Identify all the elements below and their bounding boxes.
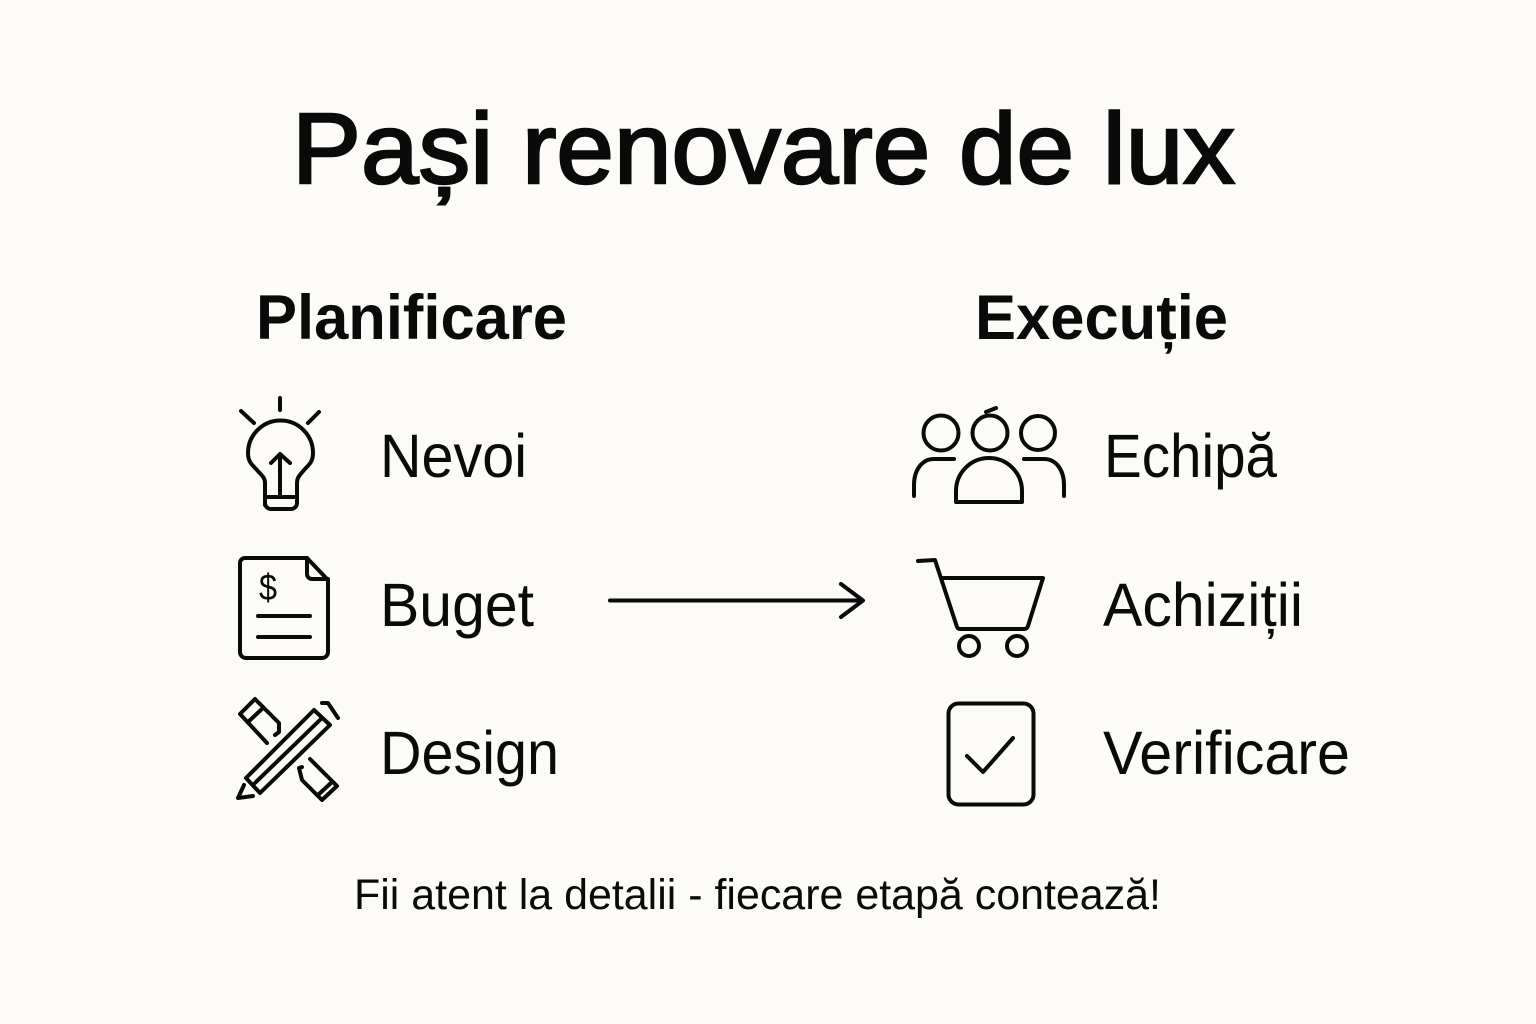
title: Pași renovare de lux bbox=[292, 93, 1235, 205]
icon: checkbox bbox=[948, 704, 1034, 804]
heading: Execuție: Execuție bbox=[975, 283, 1228, 354]
label: Achiziții: Achiziții bbox=[1103, 571, 1303, 639]
icon: light bulb with arrow bbox=[241, 398, 319, 509]
label: Design: Design bbox=[380, 719, 559, 787]
footer note: Fii atent la detalii - fiecare etapă contează! bbox=[354, 871, 1161, 919]
icon: shopping cart bbox=[918, 560, 1043, 656]
label: Buget: Buget bbox=[380, 571, 534, 639]
label: Echipă: Echipă bbox=[1104, 422, 1277, 490]
arrow from planning to execution bbox=[610, 584, 863, 617]
label: Nevoi: Nevoi bbox=[380, 422, 527, 490]
icon: budget document: $ bbox=[259, 567, 277, 608]
label: Verificare: Verificare bbox=[1103, 719, 1350, 787]
icon: budget document bbox=[240, 558, 328, 658]
icon: team of three people bbox=[914, 408, 1064, 502]
heading: Planificare: Planificare bbox=[256, 283, 567, 353]
icon: crossed pencil and ruler bbox=[238, 699, 338, 800]
